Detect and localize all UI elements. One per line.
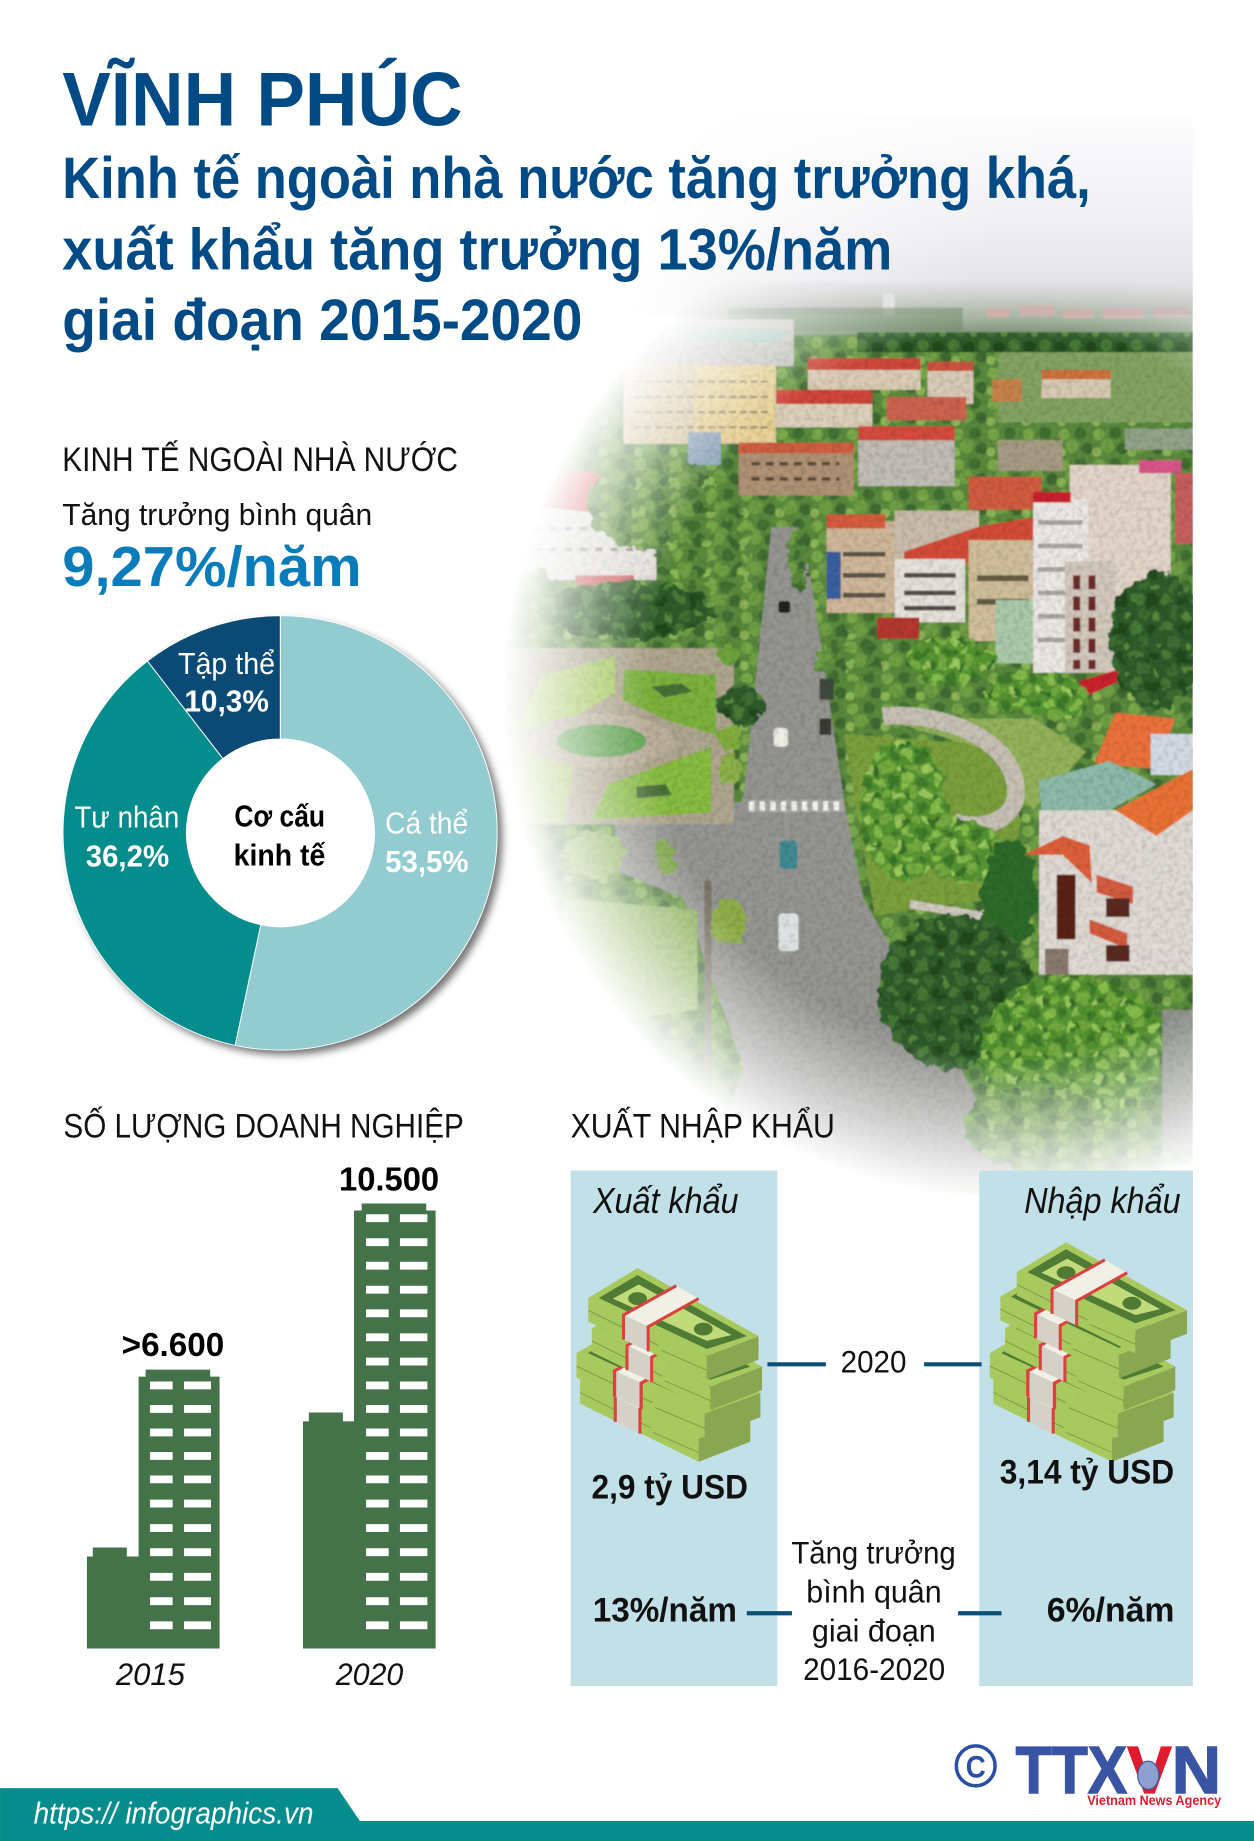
center label xyxy=(234,800,325,872)
photo grain xyxy=(562,340,1193,1126)
year label: 2020 xyxy=(841,1344,906,1380)
subtitle: xuất khẩu tăng trưởng 13%/năm xyxy=(62,217,892,282)
panel: exports xyxy=(571,1171,777,1686)
footer band xyxy=(0,1788,1254,1841)
average growth label: Tăng trưởng bình quân xyxy=(62,498,372,532)
label: Tập thể: Tập thể xyxy=(178,647,275,681)
heading: non-state economy: KINH TẾ NGOÀI NHÀ NƯỚC xyxy=(62,441,458,479)
subtitle xyxy=(62,146,1091,353)
segment: Tư nhân xyxy=(63,661,261,1045)
heading: import export: XUẤT NHẬP KHẨU xyxy=(571,1108,835,1146)
year: 2020 xyxy=(335,1656,404,1692)
value 2020: 2,9 tỷ USD xyxy=(592,1469,748,1507)
icon: money stack xyxy=(990,1242,1187,1462)
label: Cá thể: 53,5% xyxy=(385,845,468,879)
left white building with red roof xyxy=(519,505,656,580)
year: 2015 xyxy=(115,1656,185,1692)
segment: Cá thể xyxy=(235,616,497,1050)
label: Cá thể: Cá thể xyxy=(385,807,468,841)
value: >6.600 xyxy=(122,1326,224,1363)
label: Tư nhân: 36,2% xyxy=(86,839,169,873)
sky xyxy=(731,157,1193,314)
city scene xyxy=(493,282,1203,1203)
segment: Tập thể xyxy=(147,616,280,759)
average growth value: 9,27%/năm xyxy=(62,535,362,598)
logo: TTXVN: Vietnam News Agency xyxy=(1087,1793,1222,1808)
center buildings xyxy=(827,521,904,613)
label: Tập thể xyxy=(178,647,275,719)
panel: imports xyxy=(979,1171,1193,1686)
label: imports: Nhập khẩu xyxy=(1024,1180,1181,1221)
period label: Tăng trưởng xyxy=(791,1534,956,1570)
connector: average growth 2016-2020 xyxy=(747,1534,1002,1687)
subtitle: Kinh tế ngoài nhà nước tăng trưởng khá, xyxy=(62,146,1091,211)
period label: 2016-2020 xyxy=(803,1651,945,1687)
growth rate: 13%/năm xyxy=(593,1591,737,1629)
building chart: 2015 xyxy=(87,1326,224,1692)
logo: TTXVN xyxy=(1016,1733,1222,1808)
label: Tư nhân xyxy=(74,801,179,873)
website url: https:// infographics.vn xyxy=(34,1796,314,1830)
photo: aerial view of Vinh Phuc city xyxy=(493,115,1203,1203)
icon: copyright xyxy=(956,1746,995,1786)
period label xyxy=(791,1534,956,1687)
donut chart: economic structure xyxy=(63,616,497,1050)
park left xyxy=(511,648,734,824)
title: VĨNH PHÚC xyxy=(62,58,463,143)
subtitle: giai đoạn 2015-2020 xyxy=(62,288,582,353)
label: Tập thể: 10,3% xyxy=(184,685,269,719)
center label: kinh tế xyxy=(234,838,325,872)
growth rate: 6%/năm xyxy=(1047,1591,1174,1629)
right park xyxy=(844,734,1022,916)
icon: copyright: C xyxy=(966,1749,986,1785)
villa xyxy=(1039,810,1193,975)
label: Cá thể xyxy=(385,807,468,879)
vehicles xyxy=(774,728,788,747)
building icon 2020 xyxy=(303,1203,436,1648)
label: exports: Xuất khẩu xyxy=(592,1180,739,1221)
value: 10.500 xyxy=(339,1161,439,1198)
building chart: 2020 xyxy=(303,1161,439,1692)
label: Tư nhân: Tư nhân xyxy=(74,801,179,835)
logo: TTXVN: N xyxy=(1172,1733,1221,1808)
building icon 2015 xyxy=(87,1370,220,1648)
value 2020: 3,14 tỷ USD xyxy=(1000,1453,1174,1491)
center label: Cơ cấu xyxy=(234,800,325,834)
period label: giai đoạn xyxy=(812,1612,936,1648)
foreground tree xyxy=(963,975,1162,1168)
logo: TTXVN: TTX xyxy=(1016,1733,1127,1808)
logo: TTXVN: V xyxy=(1127,1733,1172,1808)
heading: number of enterprises: SỐ LƯỢNG DOANH NGHIỆP xyxy=(63,1107,464,1146)
far buildings xyxy=(642,318,795,368)
trees xyxy=(496,458,1203,1070)
icon: money stack xyxy=(577,1268,762,1462)
period label: bình quân xyxy=(806,1574,942,1610)
road xyxy=(615,527,1022,1186)
